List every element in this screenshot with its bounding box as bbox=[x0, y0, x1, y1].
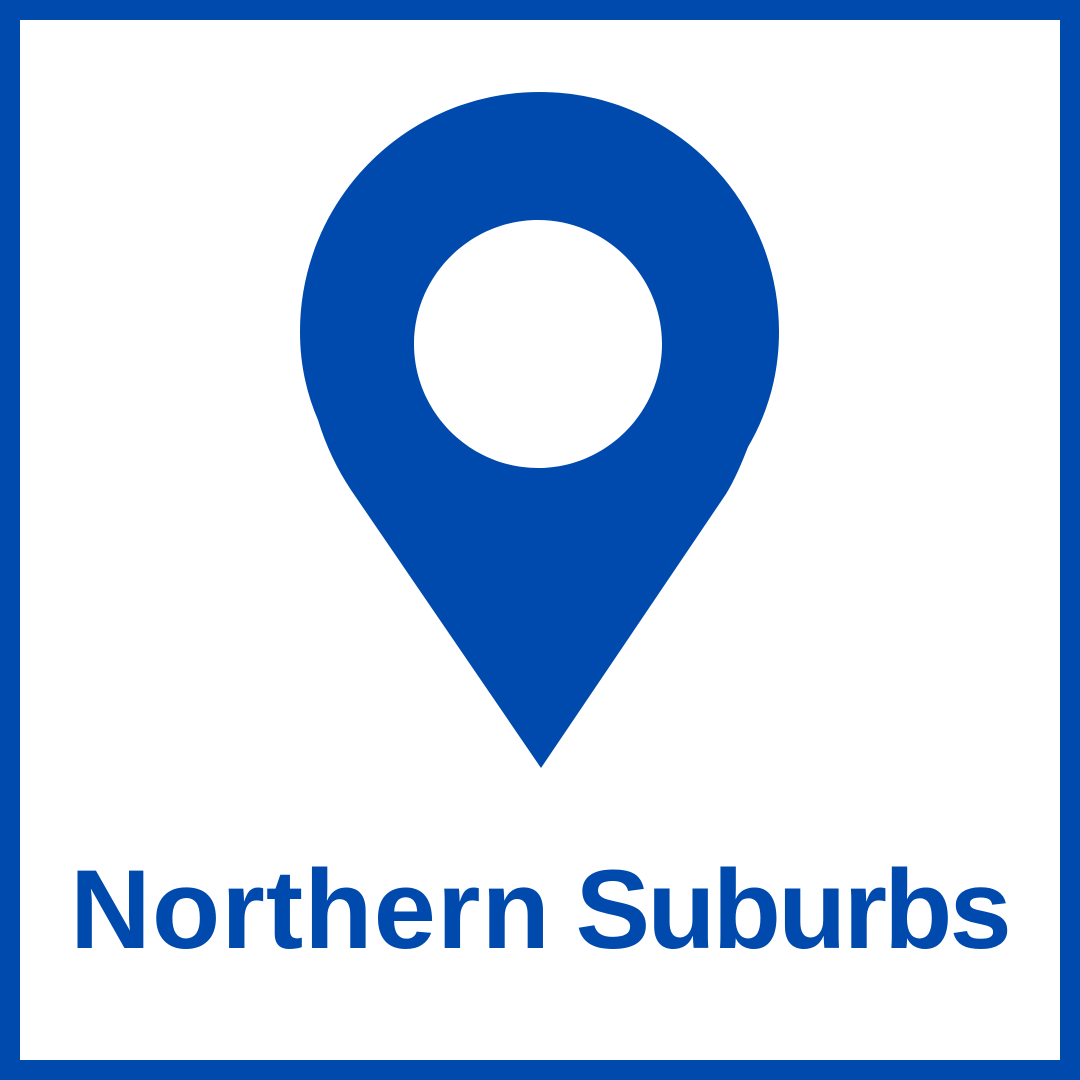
title: Northern bbox=[70, 847, 551, 972]
title: Suburbs bbox=[576, 847, 1009, 972]
title bbox=[70, 847, 1009, 972]
